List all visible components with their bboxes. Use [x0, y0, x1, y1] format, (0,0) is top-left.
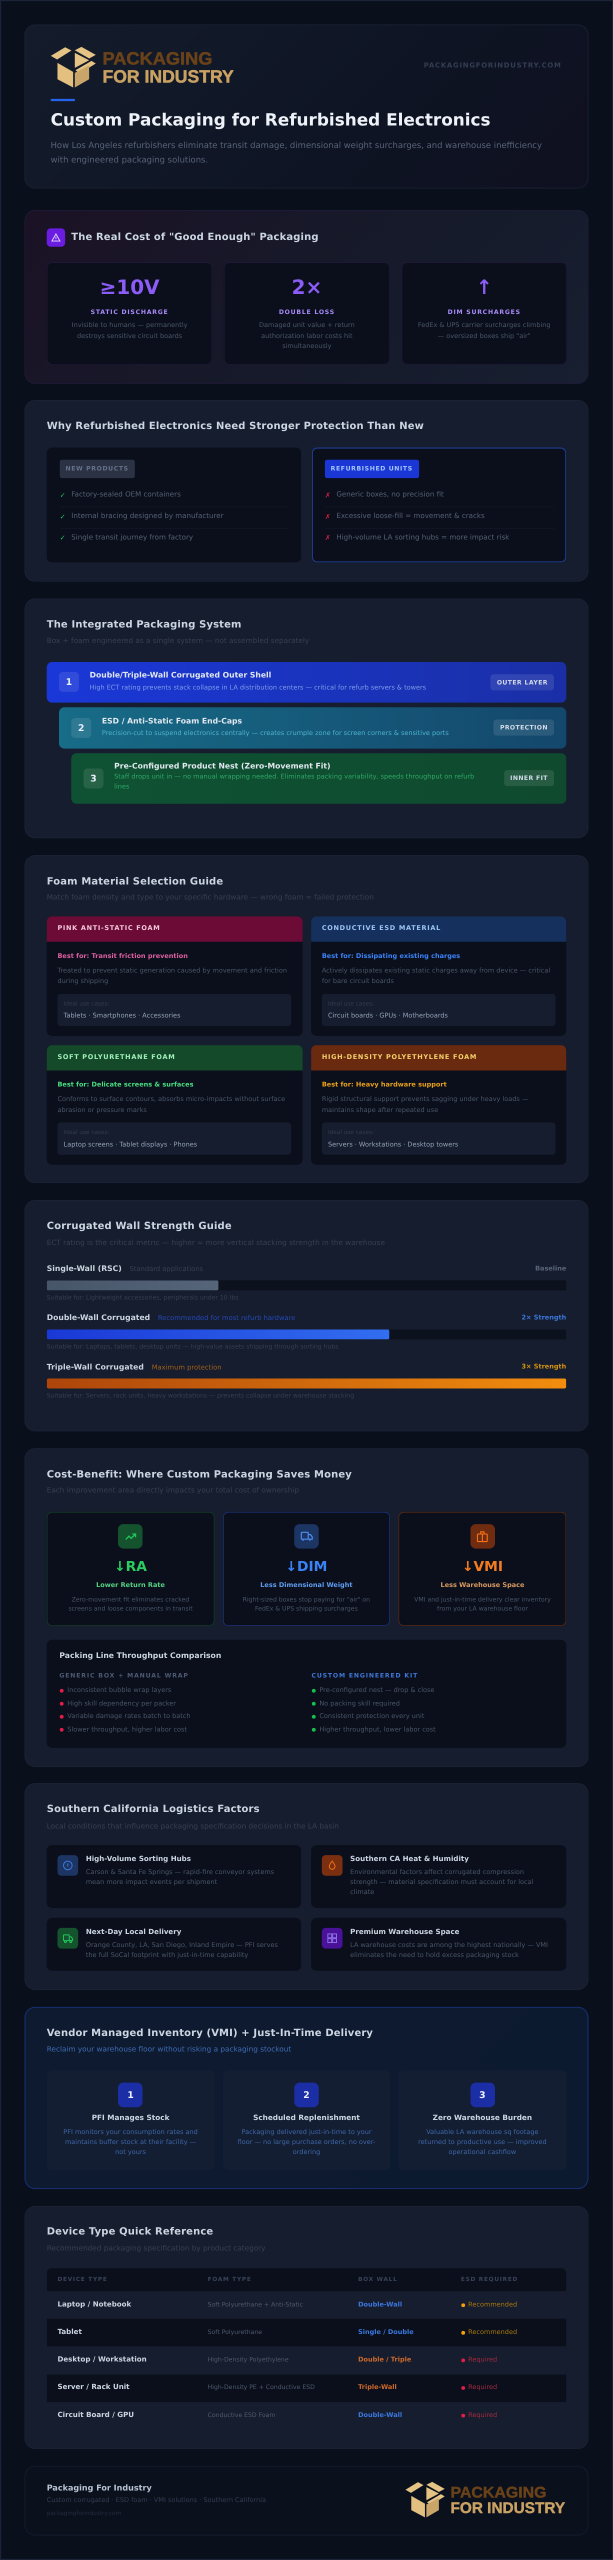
comparison title: Packing Line Throughput Comparison: [59, 1652, 221, 1660]
column: generic box: [59, 1672, 191, 1734]
badge: [59, 460, 135, 478]
card: refurbished units: [312, 447, 566, 562]
factor card: warehouse space: Premium Warehouse Space: [350, 1928, 459, 1937]
foam card: pink anti-static: Tablets · Smartphones · Accessories: [64, 1012, 180, 1020]
bar chart: triple wall: Triple-Wall Corrugated: [47, 1363, 144, 1371]
foam card: soft polyurethane: Conforms to surface contours, absorbs micro-impacts without surface: [57, 1096, 285, 1103]
subheading: Reclaim your warehouse floor without risking a packaging stockout: [47, 2045, 291, 2053]
row: circuit board: Required: [468, 2411, 497, 2419]
heading: Corrugated Wall Strength Guide: [47, 1221, 232, 1232]
icon: truck: [294, 1524, 319, 1549]
stat card: static discharge: ≥10V: [100, 277, 159, 300]
benefit card: lower return rate: [47, 1512, 214, 1626]
foam card: soft polyurethane: abrasion or pressure marks: [57, 1106, 147, 1114]
subheading: ECT rating is the critical metric — higher = more vertical stacking strength in the warehouse: [47, 1239, 385, 1247]
layer 2: foam end-caps: PROTECTION: [500, 724, 548, 731]
row: laptop: Laptop / Notebook: [57, 2300, 131, 2308]
foam card: soft polyurethane: [47, 1045, 302, 1164]
bar chart: triple wall: Maximum protection: [152, 1364, 222, 1372]
icon: drop: [322, 1855, 343, 1876]
foam card: soft polyurethane: Laptop screens · Tablet displays · Phones: [64, 1141, 197, 1148]
foam card: conductive esd: Actively dissipates existing static charges away from device — critical: [322, 967, 550, 975]
foam card: pink anti-static: Ideal use cases:: [64, 1000, 110, 1007]
heading: Why Refurbished Electronics Need Stronger Protection Than New: [47, 421, 424, 432]
foam card: high-density polyethylene: Best for: Heavy hardware support: [322, 1081, 447, 1089]
card: refurbished units: ✗: [325, 492, 331, 500]
heading: Southern California Logistics Factors: [47, 1804, 260, 1815]
heading: The Integrated Packaging System: [47, 619, 242, 630]
card: new products: ✓: [60, 535, 66, 543]
bar chart: single wall: Standard applications: [129, 1266, 203, 1274]
step 1: PFI monitors your consumption rates and: [63, 2129, 198, 2136]
layer 2: foam end-caps: ESD / Anti-Static Foam End-Caps: [102, 717, 242, 725]
panel: corrugated wall strength guide: [25, 1200, 588, 1431]
stat card: double loss: simultaneously: [282, 343, 332, 350]
bar chart: double wall: 2× Strength: [522, 1314, 566, 1322]
logo: Packaging For Industry: [50, 46, 234, 88]
panel: integrated packaging system: [25, 598, 588, 838]
step 1: 1: [127, 2089, 134, 2100]
icon: trend up: [118, 1524, 143, 1549]
foam card: high-density polyethylene: HIGH-DENSITY POLYETHYLENE FOAM: [322, 1054, 477, 1061]
icon: hub: [57, 1855, 78, 1876]
column: custom kit: Consistent protection every unit: [319, 1713, 424, 1721]
stat card: static discharge: STATIC DISCHARGE: [91, 309, 168, 316]
column: generic box: Variable damage rates batch to batch: [67, 1713, 191, 1721]
card: new products: [47, 447, 301, 562]
row: laptop: [47, 2291, 566, 2319]
layer 3: product nest: INNER FIT: [510, 775, 548, 782]
factor card: next-day delivery: Orange County, LA, San Diego, Inland Empire — PFI serves: [86, 1941, 278, 1949]
foam card: conductive esd: Best for: Dissipating existing charges: [322, 952, 460, 960]
row: tablet: Single / Double: [358, 2328, 414, 2336]
badge: NEW PRODUCTS: [66, 465, 129, 472]
layer 2: foam end-caps: [59, 707, 566, 748]
layer 3: product nest: [71, 753, 566, 804]
foam card: high-density polyethylene: maintains shape after repeated use: [322, 1106, 438, 1114]
throughput comparison: [47, 1639, 566, 1747]
heading: The Real Cost of "Good Enough" Packaging: [71, 231, 319, 243]
foam card: high-density polyethylene: Servers · Workstations · Desktop towers: [328, 1141, 458, 1148]
bar chart: double wall: Double-Wall Corrugated: [47, 1314, 150, 1322]
foam card: high-density polyethylene: [311, 1045, 566, 1164]
foam card: soft polyurethane: SOFT POLYURETHANE FOAM: [57, 1054, 175, 1061]
foam card: pink anti-static: Best for: Transit friction prevention: [57, 952, 188, 960]
icon: box: [470, 1524, 495, 1549]
card: refurbished units: Excessive loose-fill = movement & cracks: [336, 512, 485, 520]
panel: foam material selection guide: [25, 855, 588, 1183]
bar chart: triple wall: 3× Strength: [522, 1363, 566, 1371]
step 1: [47, 2070, 214, 2170]
badge: REFURBISHED UNITS: [331, 465, 413, 472]
badge: [325, 460, 419, 478]
subtitle: with engineered packaging solutions.: [51, 155, 208, 165]
row: server: Required: [468, 2384, 497, 2392]
benefit card: lower return rate: Lower Return Rate: [96, 1582, 165, 1590]
factor card: warehouse space: [311, 1918, 566, 1971]
bar chart: triple wall: [46, 1363, 566, 1399]
row: laptop: Recommended: [468, 2301, 517, 2308]
benefit card: less dimensional weight: ↓DIM: [285, 1558, 327, 1574]
factor card: next-day delivery: Next-Day Local Delivery: [86, 1928, 181, 1937]
row: tablet: Recommended: [468, 2328, 517, 2336]
factor card: warehouse space: LA warehouse costs are among the highest nationally — VMI: [350, 1941, 548, 1949]
benefit card: less dimensional weight: FedEx & UPS shipping surcharges: [255, 1605, 358, 1612]
row: tablet: [47, 2319, 566, 2346]
bar chart: single wall: Suitable for: Lightweight accessories, peripherals under 10 lbs: [47, 1294, 238, 1301]
row: circuit board: Conductive ESD Foam: [208, 2411, 275, 2418]
bar chart: triple wall: Suitable for: Servers, rack units, heavy workstations — prevents collapse under warehouse stacking: [47, 1392, 354, 1399]
card: refurbished units: ✗: [325, 535, 331, 543]
card: new products: ✓: [60, 513, 66, 521]
step 3: Valuable LA warehouse sq footage: [426, 2129, 539, 2136]
heading: Vendor Managed Inventory (VMI) + Just-In-Time Delivery: [47, 2027, 373, 2039]
icon: grid: [322, 1928, 343, 1949]
foam card: high-density polyethylene: Rigid structural support prevents sagging under heavy loads —: [322, 1096, 528, 1103]
foam card: pink anti-static: during shipping: [57, 978, 108, 985]
step 3: operational cashflow: [449, 2149, 516, 2156]
step 1: PFI Manages Stock: [92, 2114, 169, 2122]
subheading: Box + foam engineered as a single system — not assembled separately: [47, 637, 309, 645]
panel: device type quick reference: [25, 2206, 588, 2449]
bar chart: double wall: [46, 1314, 566, 1350]
footer url: packagingforindustry.com: [47, 2509, 121, 2516]
panel: cost-benefit: [25, 1448, 588, 1767]
factor card: heat and humidity: strength — material specification must account for local: [350, 1878, 533, 1886]
layer 3: product nest: 3: [90, 773, 97, 784]
foam card: conductive esd: Ideal use cases:: [328, 1000, 374, 1007]
column: generic box: Inconsistent bubble wrap layers: [67, 1687, 171, 1694]
subheading: Recommended packaging specification by product category: [47, 2244, 265, 2253]
table header: ESD REQUIRED: [461, 2276, 518, 2282]
stat card: double loss: [224, 262, 390, 365]
step 2: 2: [303, 2089, 310, 2100]
footer details: Custom corrugated · ESD foam · VMI solutions · Southern California: [47, 2496, 266, 2504]
step 2: ordering: [293, 2149, 320, 2156]
row: circuit board: [47, 2402, 566, 2429]
factor card: heat and humidity: Southern CA Heat & Humidity: [350, 1855, 469, 1864]
table header: [47, 2268, 566, 2291]
stat card: double loss: DOUBLE LOSS: [279, 309, 335, 316]
stat card: static discharge: destroys sensitive circuit boards: [77, 332, 182, 340]
logo: footer: [406, 2482, 566, 2518]
subtitle: How Los Angeles refurbishers eliminate transit damage, dimensional weight surcharges, and warehouse inefficiency: [51, 140, 542, 150]
row: desktop: [47, 2347, 566, 2374]
benefit card: lower return rate: screens and loose components in transit: [68, 1605, 193, 1612]
table: [47, 2268, 566, 2429]
row: tablet: Soft Polyurethane: [208, 2328, 262, 2335]
foam card: pink anti-static: PINK ANTI-STATIC FOAM: [57, 925, 160, 933]
card: new products: ✓: [60, 492, 66, 500]
column: generic box: Slower throughput, higher labor cost: [67, 1726, 187, 1734]
stat card: static discharge: Invisible to humans — permanently: [72, 322, 187, 330]
accent line: [51, 99, 75, 101]
stat card: dim surcharges: DIM SURCHARGES: [448, 309, 521, 316]
step 3: returned to productive use — improved: [418, 2139, 547, 2146]
panel: header: [25, 25, 588, 188]
row: server: High-Density PE + Conductive ESD: [208, 2384, 315, 2391]
row: desktop: Double / Triple: [358, 2356, 411, 2364]
step 2: [223, 2070, 390, 2170]
icon: truck: [57, 1928, 78, 1949]
foam card: conductive esd: [311, 916, 566, 1036]
bar chart: double wall: Recommended for most refurb hardware: [158, 1315, 295, 1323]
card: refurbished units: ✗: [325, 513, 331, 521]
column: custom kit: Higher throughput, lower labor cost: [319, 1726, 436, 1734]
factor card: sorting hubs: mean more impact events per shipment: [86, 1878, 217, 1886]
row: laptop: Soft Polyurethane + Anti-Static: [208, 2301, 303, 2308]
column: custom kit: No packing skill required: [319, 1700, 400, 1708]
logo: footer: FOR INDUSTRY: [450, 2499, 565, 2516]
layer 1: outer shell: Double/Triple-Wall Corrugated Outer Shell: [90, 671, 271, 680]
benefit card: lower return rate: ↓RA: [114, 1558, 147, 1574]
stat card: dim surcharges: [401, 262, 567, 365]
step 2: Packaging delivered just-in-time to your: [241, 2129, 372, 2136]
panel: vendor managed inventory: [25, 2007, 588, 2189]
foam card: conductive esd: Circuit boards · GPUs · Motherboards: [328, 1012, 448, 1020]
benefit card: less warehouse space: from your LA warehouse floor: [437, 1605, 528, 1612]
foam card: conductive esd: CONDUCTIVE ESD MATERIAL: [322, 925, 441, 933]
bar chart: single wall: [46, 1265, 566, 1301]
table header: BOX WALL: [358, 2276, 398, 2282]
step 3: 3: [479, 2089, 486, 2100]
row: desktop: High-Density Polyethylene: [208, 2356, 289, 2363]
card: new products: Single transit journey from factory: [71, 533, 193, 542]
bar chart: double wall: Suitable for: Laptops, tablets, desktop units — high-value assets shipping through sorting hubs: [47, 1343, 338, 1350]
card: refurbished units: High-volume LA sorting hubs = more impact risk: [336, 533, 509, 542]
row: desktop: Desktop / Workstation: [57, 2355, 147, 2364]
foam card: high-density polyethylene: Ideal use cases:: [328, 1129, 374, 1135]
column: custom kit: [311, 1672, 436, 1734]
benefit card: less warehouse space: ↓VMI: [462, 1558, 503, 1574]
logo: Packaging For Industry: FOR INDUSTRY: [103, 67, 234, 86]
foam card: soft polyurethane: Best for: Delicate screens & surfaces: [57, 1081, 193, 1089]
layer 1: outer shell: OUTER LAYER: [497, 679, 548, 685]
step 2: Scheduled Replenishment: [253, 2114, 360, 2122]
stat card: dim surcharges: FedEx & UPS carrier surcharges climbing: [418, 322, 551, 330]
icon: warning triangle: [47, 228, 65, 247]
step 1: not yours: [115, 2149, 146, 2156]
subheading: Match foam density and type to your specific hardware — wrong foam = failed protection: [47, 893, 374, 902]
title: Custom Packaging for Refurbished Electronics: [51, 111, 491, 130]
site url: PACKAGINGFORINDUSTRY.COM: [424, 62, 562, 70]
heading: Cost-Benefit: Where Custom Packaging Saves Money: [47, 1469, 352, 1480]
factor card: sorting hubs: [47, 1845, 301, 1908]
benefit card: less dimensional weight: [223, 1512, 390, 1626]
panel: why refurbished needs stronger protection: [25, 400, 588, 582]
card: new products: Internal bracing designed by manufacturer: [71, 512, 224, 520]
benefit card: less warehouse space: Less Warehouse Space: [441, 1582, 524, 1590]
benefit card: lower return rate: Zero-movement fit eliminates cracked: [72, 1596, 189, 1603]
layer 3: product nest: Staff drops unit in — no manual wrapping needed. Eliminates packing variability, speeds throughput on refurb: [114, 773, 474, 781]
factor card: heat and humidity: climate: [350, 1888, 374, 1896]
logo: Packaging For Industry: PACKAGING: [103, 49, 213, 68]
row: server: Triple-Wall: [358, 2384, 397, 2392]
step 3: [398, 2070, 566, 2170]
stat card: dim surcharges: ↑: [476, 277, 493, 300]
table header: DEVICE TYPE: [57, 2276, 108, 2282]
subheading: Each improvement area directly impacts your total cost of ownership: [47, 1486, 299, 1495]
factor card: heat and humidity: Environmental factors affect corrugated compression: [350, 1869, 524, 1876]
stat card: static discharge: [47, 262, 212, 365]
step 1: maintains buffer stock at their facility —: [65, 2139, 196, 2146]
benefit card: less dimensional weight: Less Dimensional Weight: [260, 1582, 352, 1590]
benefit card: less warehouse space: VMI and just-in-time delivery clear inventory: [414, 1596, 551, 1603]
layer 1: outer shell: [47, 662, 566, 703]
benefit card: less dimensional weight: Right-sized boxes stop paying for "air" on: [243, 1596, 370, 1603]
stat card: dim surcharges: — oversized boxes ship "air": [438, 332, 531, 340]
factor card: warehouse space: eliminates the need to hold excess packaging stock: [350, 1951, 519, 1959]
panel: real cost of good enough packaging: [25, 210, 588, 384]
row: tablet: Tablet: [57, 2327, 82, 2336]
stat card: double loss: authorization labor costs hit: [261, 332, 353, 340]
benefit card: less warehouse space: [399, 1512, 566, 1626]
footer: [25, 2466, 588, 2536]
bar chart: single wall: Single-Wall (RSC): [47, 1265, 122, 1273]
layer 3: product nest: Pre-Configured Product Nest (Zero-Movement Fit): [114, 762, 331, 771]
layer 2: foam end-caps: Precision-cut to suspend electronics centrally — creates crumple zone for screen corners & sensitive ports: [102, 729, 449, 737]
factor card: heat and humidity: [311, 1845, 566, 1908]
row: laptop: Double-Wall: [358, 2301, 402, 2308]
row: desktop: Required: [468, 2356, 497, 2364]
foam card: pink anti-static: [47, 916, 302, 1036]
row: circuit board: Circuit Board / GPU: [57, 2411, 134, 2419]
layer 1: outer shell: High ECT rating prevents stack collapse in LA distribution centers — critical for refurb servers & towers: [90, 684, 426, 692]
footer brand: Packaging For Industry: [47, 2483, 152, 2492]
factor card: next-day delivery: the full SoCal footprint with just-in-time capability: [86, 1951, 248, 1959]
step 2: floor — no large purchase orders, no over-: [238, 2139, 375, 2146]
foam card: pink anti-static: Treated to prevent static generation caused by movement and friction: [57, 967, 287, 975]
table header: FOAM TYPE: [208, 2276, 252, 2282]
layer 1: outer shell: 1: [66, 677, 72, 688]
foam card: soft polyurethane: Ideal use cases:: [64, 1129, 110, 1135]
row: server: Server / Rack Unit: [57, 2383, 130, 2392]
step 3: Zero Warehouse Burden: [433, 2114, 532, 2122]
factor card: sorting hubs: High-Volume Sorting Hubs: [86, 1855, 191, 1864]
foam card: conductive esd: for bare circuit boards: [322, 978, 394, 985]
column: custom kit: CUSTOM ENGINEERED KIT: [311, 1672, 418, 1679]
layer 2: foam end-caps: 2: [78, 722, 84, 733]
factor card: next-day delivery: [47, 1918, 301, 1971]
column: custom kit: Pre-configured nest — drop & close: [319, 1687, 434, 1694]
subtitle: [51, 140, 542, 165]
panel: southern california logistics factors: [25, 1783, 588, 1990]
heading: Foam Material Selection Guide: [47, 876, 223, 887]
stat card: double loss: Damaged unit value + return: [259, 322, 355, 330]
column: generic box: GENERIC BOX + MANUAL WRAP: [59, 1672, 189, 1679]
card: refurbished units: Generic boxes, no precision fit: [336, 490, 444, 499]
card: new products: Factory-sealed OEM containers: [71, 490, 181, 499]
stat card: double loss: 2×: [292, 277, 322, 300]
logo: footer: PACKAGING: [450, 2484, 546, 2501]
row: server: [47, 2374, 566, 2402]
bar chart: single wall: Baseline: [535, 1265, 566, 1273]
layer 3: product nest: lines: [114, 783, 129, 791]
column: generic box: High skill dependency per packer: [67, 1700, 176, 1708]
row: circuit board: Double-Wall: [358, 2411, 402, 2419]
factor card: sorting hubs: Carson & Santa Fe Springs — rapid-fire conveyor systems: [86, 1869, 274, 1876]
heading: Device Type Quick Reference: [47, 2226, 213, 2238]
subheading: Local conditions that influence packaging specification decisions in the LA basin: [47, 1822, 339, 1830]
